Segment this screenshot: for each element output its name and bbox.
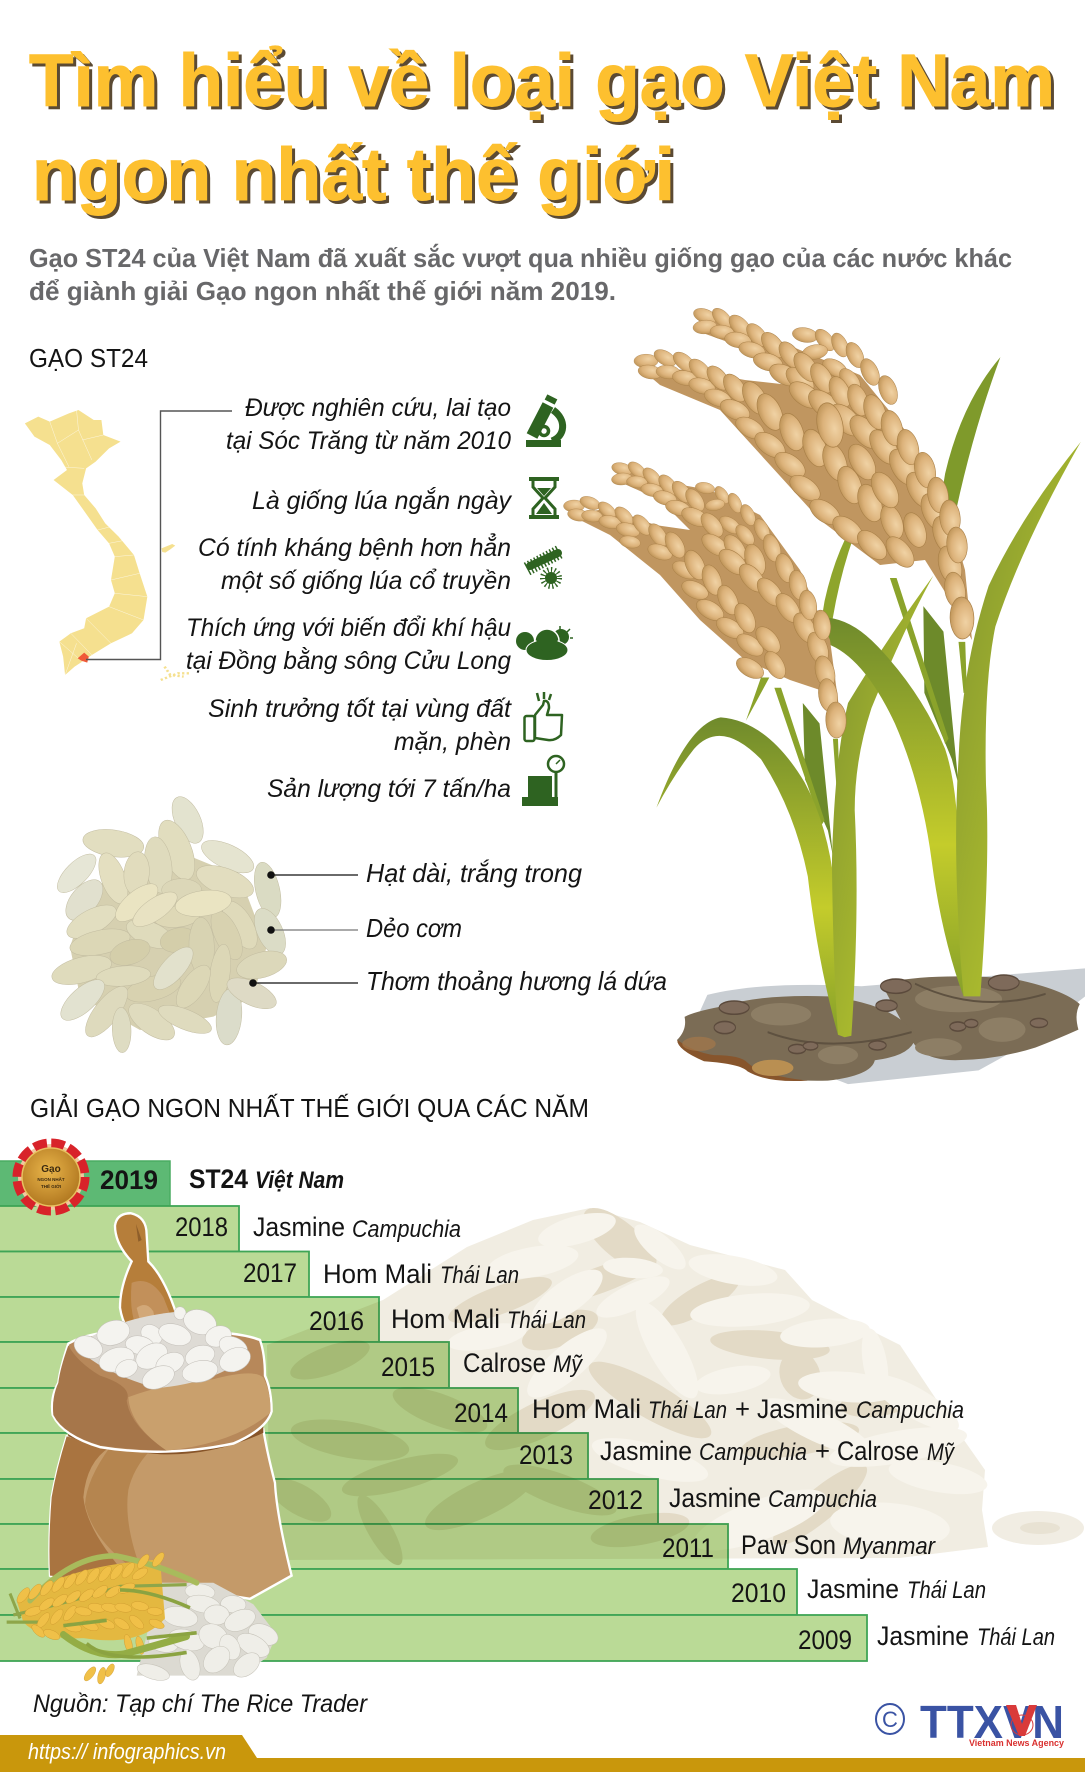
winners by year: Jasmine (600, 1436, 692, 1466)
source: Nguồn: Tạp chí The Rice Trader (33, 1690, 369, 1718)
icon: microscope (526, 397, 563, 447)
icon: cloud and sun (516, 626, 573, 660)
medal badge (18, 1144, 84, 1210)
winners by year (189, 1164, 1055, 1651)
year labels: 2015 (381, 1352, 435, 1382)
feature: saline soil (208, 695, 512, 756)
winners by year: Jasmine (669, 1483, 761, 1513)
year labels: 2009 (798, 1625, 852, 1655)
logo: TTXVN: C (882, 1707, 898, 1732)
winners by year: Thái Lan (977, 1624, 1055, 1651)
feature: saline soil: mặn, phèn (394, 728, 511, 756)
feature: research: tại Sóc Trăng từ năm 2010 (226, 427, 511, 455)
winners by year: ST24 (189, 1164, 248, 1194)
rice in sack (71, 1306, 254, 1394)
winners by year: Campuchia (856, 1397, 964, 1424)
panicles of grain (564, 305, 975, 738)
map of Vietnam (25, 410, 191, 680)
callout: long white grain: Hạt dài, trắng trong (366, 858, 583, 888)
winners by year: + (735, 1394, 750, 1424)
callout: long white grain (267, 858, 583, 888)
feature: saline soil: Sinh trưởng tốt tại vùng đất (208, 695, 512, 723)
feature: climate adaptation: Thích ứng với biến đổi khí hậu (186, 614, 511, 642)
callout: pandan aroma (249, 966, 667, 996)
winners by year: Calrose (837, 1436, 919, 1466)
sack (49, 1331, 292, 1604)
bar chart: award by year (0, 1161, 867, 1661)
winners by year: Thái Lan (507, 1307, 586, 1334)
milled rice grains (49, 792, 292, 1053)
year labels: 2013 (519, 1440, 573, 1470)
rice sack with scoop (7, 1213, 292, 1685)
year labels: 2017 (243, 1258, 297, 1288)
medal badge: THẾ GIỚI (41, 1182, 61, 1189)
scoop (115, 1213, 180, 1342)
icon: thumbs up (524, 692, 562, 741)
winners by year: Thái Lan (907, 1577, 986, 1604)
winners by year: Hom Mali (391, 1304, 500, 1334)
winners by year: Jasmine (877, 1621, 969, 1651)
icon: bacteria (527, 551, 561, 586)
callout: pandan aroma: Thơm thoảng hương lá dứa (366, 966, 667, 996)
medal badge: Gạo (41, 1164, 61, 1175)
icon: scale (522, 756, 564, 806)
feature: disease resistance (198, 532, 511, 595)
feature: disease resistance: một số giống lúa cổ truyền (221, 567, 511, 595)
winners by year: Thái Lan (648, 1397, 727, 1424)
icon: hourglass (529, 477, 559, 519)
winners by year: Jasmine (807, 1574, 899, 1604)
feature: research: Được nghiên cứu, lai tạo (245, 394, 511, 422)
medal badge: NGON NHẤT (37, 1176, 65, 1182)
feature: climate adaptation (186, 614, 511, 675)
title: Tìm hiểu về loại gạo Việt Nam (29, 39, 1055, 122)
year labels: 2019 (100, 1165, 158, 1195)
intro text: để giành giải Gạo ngon nhất thế giới năm 2019. (29, 276, 616, 306)
intro text: Gạo ST24 của Việt Nam đã xuất sắc vượt qua nhiều giống gạo của các nước khác (29, 243, 1012, 273)
year labels: 2018 (175, 1212, 228, 1242)
year labels: 2014 (454, 1398, 508, 1428)
panel: ST24 features (186, 394, 573, 806)
winners by year: Jasmine (253, 1212, 345, 1242)
winners by year: Campuchia (768, 1486, 877, 1513)
year labels: 2016 (309, 1306, 364, 1336)
callout: soft when cooked (267, 913, 462, 943)
winners by year: Hom Mali (532, 1394, 641, 1424)
year labels: 2010 (731, 1578, 786, 1608)
winners by year: Paw Son (741, 1530, 836, 1560)
footer bar (0, 1735, 1085, 1772)
title (29, 39, 1055, 216)
leaves (656, 357, 1081, 1037)
feature: research (226, 394, 511, 455)
winners by year: Thái Lan (440, 1262, 519, 1289)
year labels (100, 1165, 852, 1655)
feature: yield: Sản lượng tới 7 tấn/ha (267, 775, 511, 803)
winners by year: Jasmine (757, 1394, 848, 1424)
title: ngon nhất thế giới (32, 133, 675, 216)
winners by year: Mỹ (553, 1351, 584, 1378)
heading: awards by year: GIẢI GẠO NGON NHẤT THẾ GIỚI QUA CÁC NĂM (30, 1093, 589, 1123)
callout: soft when cooked: Dẻo cơm (366, 913, 462, 943)
feature: climate adaptation: tại Đồng bằng sông Cửu Long (186, 646, 511, 675)
heading: GẠO ST24: GẠO ST24 (29, 343, 148, 373)
soil and ground shadow (677, 968, 1085, 1084)
background rice pile (262, 1197, 1084, 1571)
leader line (86, 411, 232, 660)
callouts: grain qualities (249, 858, 667, 996)
winners by year: Việt Nam (255, 1167, 344, 1194)
winners by year: Hom Mali (323, 1259, 432, 1289)
logo: TTXVN: TTXVN (920, 1696, 1064, 1748)
winners by year: Calrose (463, 1348, 546, 1378)
year labels: 2012 (588, 1485, 643, 1515)
logo: TTXVN: Vietnam News Agency (969, 1738, 1064, 1748)
winners by year: Campuchia (352, 1216, 461, 1243)
feature: short-term: Là giống lúa ngắn ngày (252, 486, 512, 515)
loose rice pile (135, 1583, 281, 1684)
winners by year: Myanmar (843, 1533, 936, 1560)
feature: disease resistance: Có tính kháng bệnh hơn hẳn (198, 532, 511, 562)
rice plant (564, 305, 1085, 1084)
wheat sheaf (7, 1551, 197, 1685)
year labels: 2011 (662, 1533, 714, 1563)
winners by year: Campuchia (699, 1439, 807, 1466)
intro text (29, 243, 1012, 306)
website url: https:// infographics.vn (28, 1739, 226, 1764)
winners by year: + (815, 1436, 830, 1466)
winners by year: Mỹ (927, 1439, 956, 1466)
